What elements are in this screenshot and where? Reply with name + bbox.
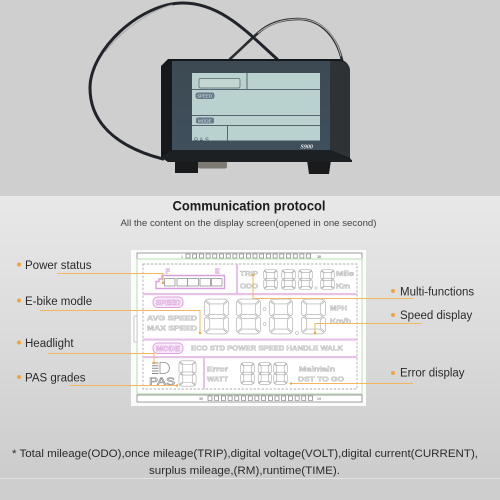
battery gauge: E	[215, 268, 220, 276]
panel: LCD segment diagram: 38	[317, 255, 321, 259]
panel: LCD segment diagram	[131, 250, 366, 406]
headlight icon	[152, 362, 170, 374]
panel: LCD segment diagram: 39	[199, 397, 203, 401]
LCD labels: MPH	[330, 306, 347, 312]
battery gauge: F	[166, 268, 170, 276]
footnote: * Total mileage(ODO),once mileage(TRIP),digital voltage(VOLT),digital current(CURRENT),	[12, 448, 478, 460]
LCD labels	[147, 271, 354, 388]
LCD labels: Error	[207, 366, 228, 374]
seven-segment digits	[179, 270, 334, 386]
callout: Speed display	[314, 310, 472, 334]
callout: E-bike modle: E-bike modle	[25, 296, 92, 308]
bottom bevel	[161, 150, 352, 162]
photo: S900 display with cables: SPEED	[197, 94, 213, 98]
photo: S900 display with cables	[90, 3, 352, 174]
lower panel background	[0, 196, 500, 478]
photo: S900 display with cables: MODE	[198, 118, 212, 123]
LCD labels: Km/h	[330, 318, 351, 326]
subtitle: All the content on the display screen(opened in one second)	[120, 218, 376, 229]
lcd screen	[192, 73, 320, 140]
SPEED badge: SPEED	[156, 300, 180, 307]
panel: LCD segment diagram: 19	[317, 397, 321, 401]
feet	[175, 160, 198, 173]
callout: Speed display: Speed display	[400, 310, 472, 322]
callout: PAS grades: PAS grades	[25, 372, 86, 384]
connector pins	[186, 254, 312, 400]
screen pills	[196, 92, 214, 99]
MODE badge: MODE	[156, 346, 180, 353]
LCD labels: DST TO GO	[298, 376, 345, 384]
LCD labels: Mile	[336, 271, 354, 278]
callout: PAS grades	[17, 372, 178, 387]
LCD labels: ODO	[240, 284, 259, 290]
LCD labels: AVG SPEED	[147, 316, 197, 322]
cables	[90, 3, 342, 159]
LCD labels: ECO STD POWER SPEED HANDLE WALK	[191, 346, 343, 352]
panel: LCD segment diagram: 1	[181, 255, 183, 259]
callout: Error display: Error display	[400, 368, 465, 380]
photo: S900 display with cables: PAS	[194, 138, 209, 144]
callout: Power status: Power status	[25, 260, 92, 272]
callout: Error display	[290, 368, 465, 385]
photo background	[0, 0, 500, 196]
footnote: surplus mileage,(RM),runtime(TIME).	[149, 465, 340, 477]
callout: Multi-functions: Multi-functions	[400, 286, 474, 298]
callout: Headlight	[17, 338, 155, 364]
LCD labels: WATT	[207, 376, 229, 384]
right flange	[330, 61, 350, 158]
bezel	[172, 61, 330, 150]
callout: E-bike modle	[17, 296, 201, 334]
LCD labels: TRIP	[240, 271, 258, 278]
callout: Power status	[17, 260, 164, 284]
LCD labels: PAS	[149, 376, 175, 388]
LCD labels: Maintain	[299, 366, 335, 374]
SPEED badge	[153, 297, 183, 308]
model label: S900	[300, 144, 313, 150]
callout: Multi-functions	[252, 274, 474, 298]
callout: Headlight: Headlight	[25, 338, 74, 350]
footnote	[12, 448, 478, 477]
battery gauge	[156, 268, 224, 288]
LCD labels: MAX SPEED	[147, 326, 197, 332]
LCD labels: Km	[336, 284, 350, 290]
device body	[161, 59, 352, 162]
MODE badge	[153, 343, 183, 354]
connector	[198, 161, 227, 168]
title: Communication protocol	[172, 198, 326, 214]
